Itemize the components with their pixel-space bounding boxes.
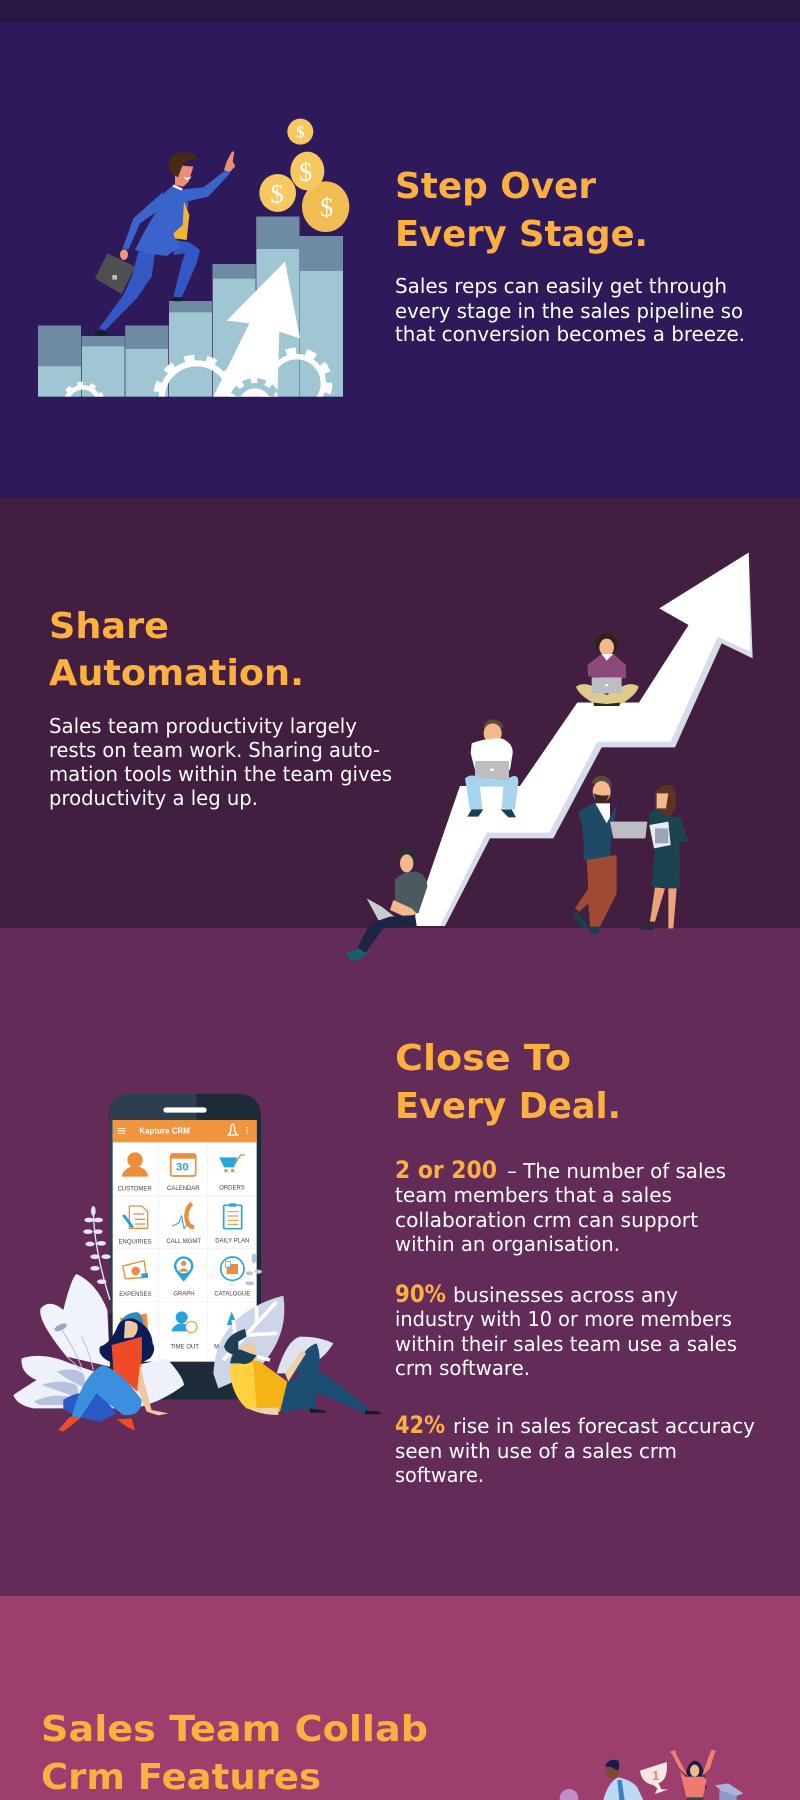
body text: every stage in the sales pipeline so	[395, 299, 743, 323]
app labels	[118, 1186, 250, 1351]
stat: 2 or 200	[395, 1156, 726, 1256]
app labels: ENQUIRIES	[119, 1239, 151, 1245]
app labels: EXPENSES	[119, 1292, 151, 1298]
app labels: CATALOGUE	[214, 1292, 250, 1298]
stat: 90%: within their sales team use a sales	[395, 1332, 737, 1356]
stat: 90%: industry with 10 or more members	[395, 1307, 732, 1331]
body text: that conversion becomes a breeze.	[395, 322, 745, 346]
person with laptop sitting mid	[465, 719, 518, 817]
dollar coins	[259, 119, 349, 232]
panel: step over every stage	[38, 118, 743, 397]
body text: mation tools within the team gives	[49, 762, 392, 786]
phone	[109, 1094, 261, 1399]
heading: Step Over	[395, 166, 596, 207]
stat: 42%: rise in sales forecast accuracy	[453, 1414, 755, 1438]
illustration: businessman climbing bar chart	[38, 118, 350, 397]
dollar coins: $	[270, 179, 284, 209]
woman sitting	[58, 1312, 168, 1432]
top strip	[0, 0, 800, 22]
person cross-legged	[576, 633, 639, 706]
stat: 2 or 200: team members that a sales	[395, 1183, 672, 1207]
app labels: TIME OUT	[170, 1345, 199, 1351]
app labels: M	[214, 1345, 219, 1351]
man sitting with phone	[224, 1329, 381, 1415]
stat: 42%: seen with use of a sales crm	[395, 1439, 677, 1463]
dollar coins: $	[296, 123, 304, 142]
balloon	[560, 1789, 578, 1800]
heading: Crm Features	[41, 1757, 321, 1798]
body text: productivity a leg up.	[49, 786, 258, 810]
stat: 42%	[395, 1411, 755, 1487]
heading	[41, 1709, 428, 1798]
panel: sales team collab crm features	[0, 1596, 800, 1800]
heading: Share	[49, 606, 169, 647]
plants	[13, 1206, 333, 1408]
illustration: phone with two people	[13, 1094, 381, 1432]
gears	[62, 348, 332, 397]
stat: 42%: software.	[395, 1463, 484, 1487]
bar chart steps	[38, 217, 343, 397]
illustration: celebrating team	[560, 1750, 743, 1800]
rising arrow	[213, 262, 300, 397]
stat: 90%: 90%	[395, 1280, 446, 1308]
trophy	[640, 1762, 668, 1794]
colleagues standing with laptop	[572, 776, 688, 933]
body text: Sales team productivity largely	[49, 714, 357, 738]
panel: close to every deal	[0, 928, 800, 1596]
body text: rests on team work. Sharing auto-	[49, 738, 380, 762]
man in blue shirt	[603, 1760, 643, 1800]
stat: 2 or 200: 2 or 200	[395, 1156, 497, 1184]
stat: 90%: businesses across any	[453, 1283, 678, 1307]
stat: 42%: 42%	[395, 1411, 445, 1439]
app labels: CALENDAR	[167, 1186, 200, 1192]
dollar coins: $	[299, 157, 312, 187]
illustration: arrow and team	[345, 553, 753, 962]
app labels: ORDERS	[219, 1186, 245, 1192]
body text	[49, 714, 392, 810]
heading: Close To	[395, 1038, 571, 1079]
phone: Kapture CRM	[139, 1127, 190, 1136]
heading: Every Stage.	[395, 214, 648, 255]
stat: 2 or 200: collaboration crm can support	[395, 1208, 698, 1232]
heading	[395, 166, 648, 255]
stepped arrow	[412, 553, 753, 926]
app labels: CUSTOMER	[118, 1186, 152, 1192]
body text	[395, 274, 745, 346]
woman arms raised	[670, 1750, 716, 1800]
app labels: GRAPH	[173, 1292, 195, 1298]
app icons: 30	[176, 1162, 189, 1174]
gear over arrow	[230, 378, 278, 397]
app labels: DAILY PLAN	[215, 1239, 249, 1245]
trophy: 1	[652, 1769, 659, 1783]
heading: Sales Team Collab	[41, 1709, 428, 1750]
stat: 90%: crm software.	[395, 1356, 530, 1380]
heading: Automation.	[49, 653, 304, 694]
stat: 2 or 200: – The number of sales	[507, 1159, 726, 1183]
heading: Every Deal.	[395, 1086, 621, 1127]
stat: 2 or 200: within an organisation.	[395, 1232, 620, 1256]
heading	[49, 606, 304, 694]
person with laptop bottom-left	[345, 848, 427, 962]
graduation cap	[715, 1783, 743, 1800]
stat: 90%	[395, 1280, 737, 1380]
businessman	[95, 151, 235, 336]
panel: share automation	[0, 498, 800, 928]
app icons	[120, 1152, 245, 1333]
heading	[395, 1038, 621, 1127]
body text: Sales reps can easily get through	[395, 274, 727, 298]
app labels: CALL MGMT	[166, 1239, 201, 1245]
dollar coins: $	[320, 192, 333, 222]
